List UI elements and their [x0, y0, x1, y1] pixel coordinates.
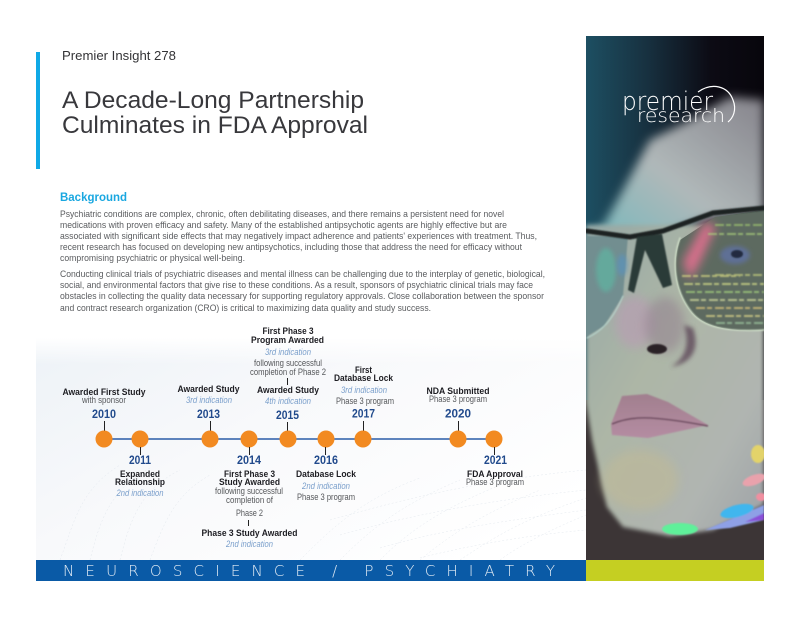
body text: first paragraph: Psychiatric conditions are complex, chronic, often debilitating diseases, and there remains a persistent need for novel: [60, 209, 504, 219]
cheek warmth: [602, 450, 678, 510]
milestone 2017: [334, 365, 394, 448]
milestone 2010: Awarded First Study: [62, 387, 146, 397]
milestone 2010: 2010: [92, 409, 116, 421]
milestone 2020: [426, 386, 490, 448]
title: A Decade-Long Partnership: [62, 87, 364, 114]
milestone 2015: First Phase 3: [262, 326, 314, 336]
milestone 2014: [202, 430, 298, 549]
title: [62, 87, 368, 139]
milestone 2011: Relationship: [115, 477, 165, 487]
body text: second paragraph: social, and environmental factors that give rise to these conditions. As a result, sponsors of psychiatric clinical trials may face: [60, 280, 533, 290]
milestone 2013: 3rd indication: [186, 395, 232, 405]
lower face: [586, 225, 764, 536]
logo: premier research: research: [637, 105, 725, 127]
milestone 2014: 2nd indication: [225, 539, 273, 549]
milestone 2017: 3rd indication: [341, 385, 387, 395]
neck shadow: [586, 400, 764, 560]
milestone 2015: following successful: [254, 358, 322, 368]
accent bar: [36, 52, 40, 169]
milestone 2020: NDA Submitted: [426, 386, 490, 396]
left lens: [586, 236, 628, 337]
eyebrow: Premier Insight 278: Premier Insight 278: [62, 48, 176, 63]
milestone 2021: [466, 430, 524, 487]
timeline background panel: [36, 338, 586, 560]
body text: first paragraph: associated with significant side effects that may negatively impact adherence and patients' experiences with treatment. Thus,: [60, 231, 537, 241]
forehead: [586, 97, 764, 236]
glasses frame: [587, 208, 764, 338]
banner: neuroscience / psychiatry: NEUROSCIENCE / PSYCHIATRY: [63, 562, 555, 580]
milestone 2017: Phase 3 program: [336, 396, 394, 406]
timeline axis: [104, 438, 494, 440]
body text: second paragraph: obstacles in collecting the quality data necessary for supporting regulatory approvals. Close collaboration between the sponsor: [60, 291, 544, 301]
milestone 2016: Database Lock: [296, 469, 357, 479]
milestone 2013: 2013: [197, 409, 220, 421]
milestone 2010: with sponsor: [81, 395, 126, 405]
milestone 2015: Awarded Study: [257, 385, 319, 395]
body text: second paragraph: [60, 269, 545, 313]
mouth: [611, 394, 708, 438]
milestone 2021: 2021: [484, 455, 508, 467]
milestone 2020: 2020: [445, 408, 471, 420]
milestone 2011: Expanded: [120, 469, 160, 479]
milestone 2021: Phase 3 program: [466, 477, 524, 487]
body text: first paragraph: medications with proven efficacy and safety. Many of the established antipsychotic agents are highly effective but are: [60, 220, 507, 230]
right lens: [676, 210, 764, 330]
milestone 2015: 2015: [276, 410, 300, 422]
milestone 2014: Phase 3 Study Awarded: [202, 528, 298, 538]
heading: Background: Background: [60, 192, 127, 204]
milestone 2014: completion of: [226, 495, 273, 505]
rainbow light reflections: [662, 445, 767, 535]
milestone 2020: Phase 3 program: [429, 394, 487, 404]
milestone 2017: 2017: [352, 408, 375, 420]
body text: second paragraph: and contract research organization (CRO) is critical to maximizing data quality and study success.: [60, 303, 431, 313]
milestone 2017: First: [355, 365, 372, 375]
photo: woman in glasses lit by code: [586, 36, 767, 560]
title: Culminates in FDA Approval: [62, 112, 368, 139]
milestone 2016: [296, 430, 357, 502]
milestone 2016: 2nd indication: [301, 481, 350, 491]
milestone 2017: Database Lock: [334, 373, 394, 383]
body text: first paragraph: compromising psychiatric or physical well-being.: [60, 253, 245, 263]
milestone 2010: [62, 387, 146, 448]
body text: second paragraph: Conducting clinical trials of psychiatric diseases and mental illness can be challenging due to the interplay of genetic, biological,: [60, 269, 545, 279]
body text: first paragraph: recent research has focused on developing new antipsychotics, including those that address the need for efficacy without: [60, 242, 522, 252]
milestone 2015: 4th indication: [265, 396, 311, 406]
milestone 2014: following successful: [215, 486, 283, 496]
milestone 2014: First Phase 3: [224, 469, 275, 479]
milestone 2014: 2014: [237, 455, 262, 467]
milestone 2011: 2nd indication: [116, 488, 164, 498]
milestone 2014: Phase 2: [236, 508, 263, 518]
milestone 2011: [115, 430, 165, 498]
milestone 2011: 2011: [129, 455, 152, 467]
lime colour block: [586, 560, 764, 581]
milestone 2015: [250, 326, 326, 448]
milestone 2013: Awarded Study: [178, 384, 240, 394]
logo: premier research: premier: [622, 87, 713, 117]
milestone 2015: completion of Phase 2: [250, 367, 326, 377]
milestone 2013: [178, 384, 240, 448]
milestone 2016: 2016: [314, 455, 338, 467]
milestone 2015: Program Awarded: [251, 335, 324, 345]
milestone 2016: Phase 3 program: [297, 492, 355, 502]
milestone 2015: 3rd indication: [265, 347, 311, 357]
body text: first paragraph: [60, 209, 537, 263]
nose: [615, 296, 696, 367]
milestone 2014: Study Awarded: [219, 477, 280, 487]
milestone 2021: FDA Approval: [467, 469, 523, 479]
